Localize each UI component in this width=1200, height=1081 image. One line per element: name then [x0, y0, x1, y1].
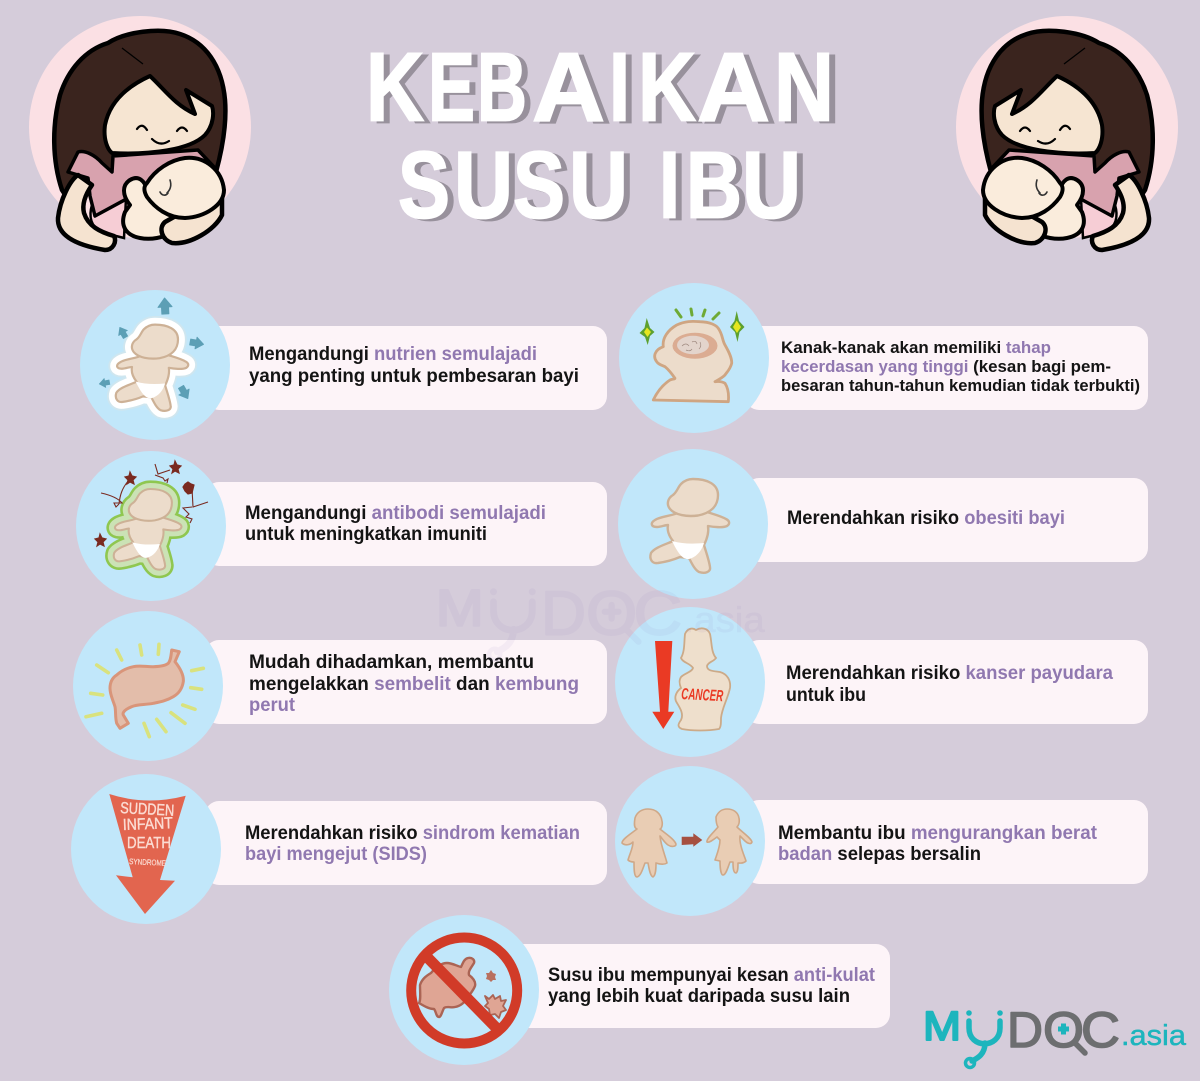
title: U — [454, 132, 513, 238]
title: U — [460, 134, 519, 240]
title: U — [575, 134, 634, 240]
text: perut — [249, 695, 296, 716]
text — [245, 823, 580, 865]
text: untuk meningkatkan imuniti — [245, 524, 487, 545]
title: S — [513, 132, 565, 238]
watermark logo: M — [436, 580, 484, 637]
title: K — [638, 33, 696, 142]
text — [781, 338, 1140, 395]
icon: SIDS down arrow: DEATH — [127, 835, 171, 852]
title: B — [477, 33, 527, 142]
text: Mengandungi nutrien semulajadi — [249, 344, 537, 365]
text — [548, 965, 876, 1007]
text: Merendahkan risiko sindrom kematian — [245, 823, 580, 844]
item: mengurangkan berat badan — [615, 766, 1148, 916]
item: obesiti bayi — [618, 449, 1148, 599]
logo: MyDOC.asia: .asia — [1121, 1020, 1187, 1052]
logo: MyDOC.asia: C — [1081, 1002, 1120, 1058]
text: Membantu ibu mengurangkan berat — [778, 823, 1098, 844]
text: Merendahkan risiko kanser payudara — [786, 663, 1113, 684]
title: A — [532, 33, 605, 142]
text: kecerdasan yang tinggi (kesan bagi pem- — [781, 357, 1111, 376]
watermark logo — [436, 578, 766, 660]
logo: MyDOC.asia — [923, 1002, 1187, 1068]
watermark logo: D — [541, 578, 586, 648]
title: A — [697, 33, 770, 142]
title: N — [780, 35, 840, 144]
title: E — [434, 35, 481, 144]
title: I — [665, 134, 686, 240]
item: sembelit dan kembung perut — [73, 611, 607, 761]
logo: MyDOC.asia: M — [923, 1003, 961, 1049]
text — [786, 663, 1113, 706]
icon: growing baby — [98, 298, 205, 411]
watermark logo: C — [634, 578, 682, 648]
watermark logo: .asia — [684, 599, 766, 640]
title: I — [659, 132, 680, 238]
text: besaran tahun-tahun kemudian tidak terbukti) — [781, 376, 1140, 395]
icon: SIDS down arrow: SYNDROME — [129, 857, 166, 868]
text: untuk ibu — [786, 685, 866, 706]
title: A — [538, 35, 611, 144]
item: antibodi semulajadi — [76, 451, 607, 601]
title — [366, 33, 840, 240]
text — [249, 344, 579, 387]
title: K — [366, 33, 424, 142]
logo: MyDOC.asia: D — [1007, 1002, 1043, 1058]
item: nutrien semulajadi — [80, 290, 607, 440]
title: B — [692, 134, 748, 240]
text: Kanak-kanak akan memiliki tahap — [781, 338, 1051, 357]
text — [245, 503, 546, 545]
title: S — [398, 132, 450, 238]
title: I — [609, 33, 630, 142]
text: Mengandungi antibodi semulajadi — [245, 503, 546, 524]
logo: MyDOC.asia: O — [1043, 1002, 1084, 1058]
item: tahap kecerdasan — [619, 283, 1148, 433]
text: Merendahkan risiko obesiti bayi — [787, 508, 1065, 529]
icon: baby with antibody shield — [95, 461, 208, 570]
text: yang penting untuk pembesaran bayi — [249, 366, 579, 387]
icon: SIDS down arrow: SUDDEN — [120, 800, 175, 820]
text: Susu ibu mempunyai kesan anti-kulat — [548, 965, 876, 986]
title: S — [404, 134, 456, 240]
title: N — [774, 33, 834, 142]
title: I — [615, 35, 636, 144]
title: A — [703, 35, 776, 144]
icon: SIDS down arrow: INFANT — [123, 815, 173, 834]
illustration: mother breastfeeding left — [29, 16, 251, 250]
text: Mudah dihadamkan, membantu — [249, 652, 534, 673]
title: S — [519, 134, 571, 240]
watermark logo: O — [586, 578, 637, 648]
title: B — [483, 35, 533, 144]
icon: cancer risk arrow and torso — [652, 628, 730, 730]
title: U — [569, 132, 628, 238]
item: anti-kulat — [389, 915, 890, 1065]
title: U — [748, 134, 807, 240]
illustration: mother breastfeeding right — [956, 16, 1178, 250]
icon: baby — [650, 479, 729, 573]
text — [778, 823, 1098, 865]
title: K — [644, 35, 702, 144]
icon: SIDS down arrow — [109, 794, 186, 914]
title: B — [686, 132, 742, 238]
text: mengelakkan sembelit dan kembung — [249, 674, 579, 695]
item: kanser payudara — [615, 607, 1148, 757]
icon: head with brain — [640, 309, 744, 402]
title: K — [372, 35, 430, 144]
text — [249, 652, 579, 716]
text: badan selepas bersalin — [778, 844, 981, 865]
title: E — [428, 33, 475, 142]
icon: cancer risk arrow and torso: CANCER — [681, 686, 724, 705]
item: SIDS — [71, 774, 607, 924]
text: yang lebih kuat daripada susu lain — [548, 986, 850, 1007]
title: U — [742, 132, 801, 238]
icon: no fungus sign — [411, 938, 517, 1044]
text: bayi mengejut (SIDS) — [245, 844, 427, 865]
icon: glowing stomach — [86, 644, 203, 737]
icon: weight loss figures — [622, 809, 752, 877]
